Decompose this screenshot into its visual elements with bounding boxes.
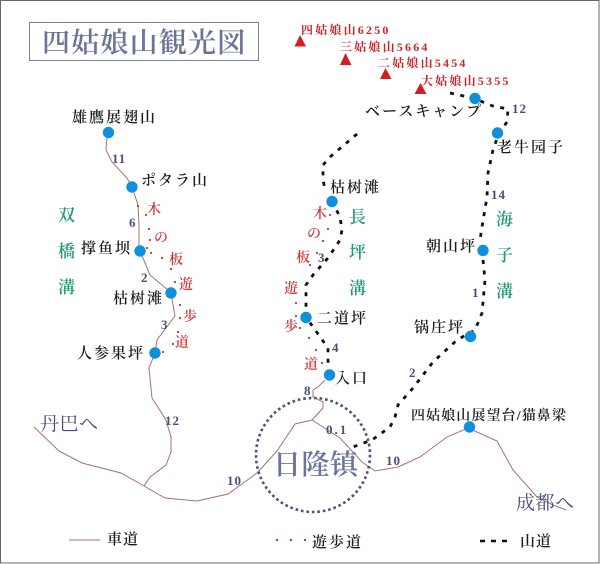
distance numbers: 10: [386, 453, 401, 468]
distance numbers: [112, 101, 527, 488]
distance numbers: 2: [141, 270, 148, 285]
mountain trails: [306, 93, 508, 448]
road network: [34, 138, 566, 510]
road: to entrance: [312, 380, 325, 420]
road: left valley: [106, 138, 175, 486]
location labels: [72, 103, 567, 424]
walking path labels: 板: [169, 251, 183, 268]
distance numbers: 3: [318, 250, 326, 265]
legend: walking path: 遊歩道: [312, 533, 363, 551]
walking path labels: 遊: [284, 280, 298, 297]
valley names: 長: [349, 208, 366, 227]
distance numbers: 3: [161, 317, 168, 332]
location labels: 四姑娘山展望台/猫鼻梁: [411, 407, 567, 424]
location labels: 撑鱼坝: [81, 239, 132, 257]
location labels: 朝山坪: [426, 237, 477, 255]
walking paths: [137, 205, 331, 372]
town name: 日隆镇: [273, 449, 361, 481]
location labels: 入口: [335, 370, 369, 387]
legend: walking path: [276, 533, 363, 551]
location labels: 枯树滩: [330, 178, 381, 196]
distance numbers: 12: [512, 101, 527, 116]
peak markers: [294, 35, 426, 94]
location labels: 锅庄坪: [414, 319, 465, 336]
distance numbers: 12: [165, 413, 180, 428]
distance numbers: 4: [332, 340, 340, 355]
location labels: ベースキャンプ: [365, 103, 483, 120]
walking path labels: 歩: [284, 318, 298, 335]
walking path labels: の: [154, 231, 168, 246]
distance numbers: 2: [409, 365, 416, 380]
walking path labels: 木: [313, 205, 327, 222]
valley names: 溝: [349, 279, 366, 298]
walking path labels: 遊: [179, 276, 193, 293]
location labels: 人参果坪: [77, 345, 145, 362]
location dots: [103, 93, 503, 433]
valley names: 双: [58, 206, 75, 225]
walking path labels: 道: [304, 357, 318, 373]
peak labels: 四姑娘山6250: [301, 22, 391, 37]
road: main: [34, 420, 566, 510]
walking path labels: 板: [296, 249, 310, 266]
valley names: 溝: [496, 282, 513, 301]
trail: east valley: [350, 93, 508, 448]
location labels: 雄鷹展翅山: [72, 108, 157, 126]
valley names: 子: [496, 246, 513, 265]
location labels: ポタラ山: [141, 172, 209, 189]
distance numbers: 1: [472, 285, 480, 300]
walking path labels: 歩: [183, 308, 197, 325]
valley names: 坪: [349, 243, 366, 262]
title: 四姑娘山観光図: [42, 27, 246, 59]
distance numbers: 10: [227, 473, 242, 488]
legend: mountain trail: [480, 533, 552, 550]
distance numbers: 11: [112, 151, 126, 166]
peak labels: 三姑娘山5664: [340, 39, 430, 54]
peak labels: [301, 22, 511, 88]
walking path labels: 木: [147, 201, 161, 218]
location labels: 二道坪: [317, 310, 368, 327]
valley names: 溝: [58, 278, 75, 297]
valley names: 橋: [58, 242, 75, 261]
town circle: [256, 398, 370, 512]
peak labels: 大姑娘山5355: [421, 73, 511, 88]
location labels: 老牛园子: [497, 138, 565, 156]
location labels: 枯树滩: [113, 289, 164, 307]
distance numbers: 8: [304, 383, 312, 398]
walking path labels: の: [307, 227, 321, 242]
valley names: 海: [496, 210, 513, 229]
legend: road: 車道: [107, 530, 139, 548]
legend: mountain trail: 山道: [520, 533, 552, 550]
destination: Danba: 丹巴へ: [40, 414, 99, 435]
trail: central valley: [306, 134, 357, 368]
distance numbers: 6: [129, 215, 136, 230]
walking path labels: 道: [175, 335, 189, 351]
walking path labels: [147, 201, 327, 373]
destination: Chengdu: 成都へ: [516, 492, 575, 514]
legend: road: [69, 530, 139, 548]
distance numbers: 0.1: [326, 422, 348, 437]
distance numbers: 14: [491, 187, 506, 202]
valley names: [58, 206, 513, 301]
peak labels: 二姑娘山5454: [378, 55, 468, 70]
